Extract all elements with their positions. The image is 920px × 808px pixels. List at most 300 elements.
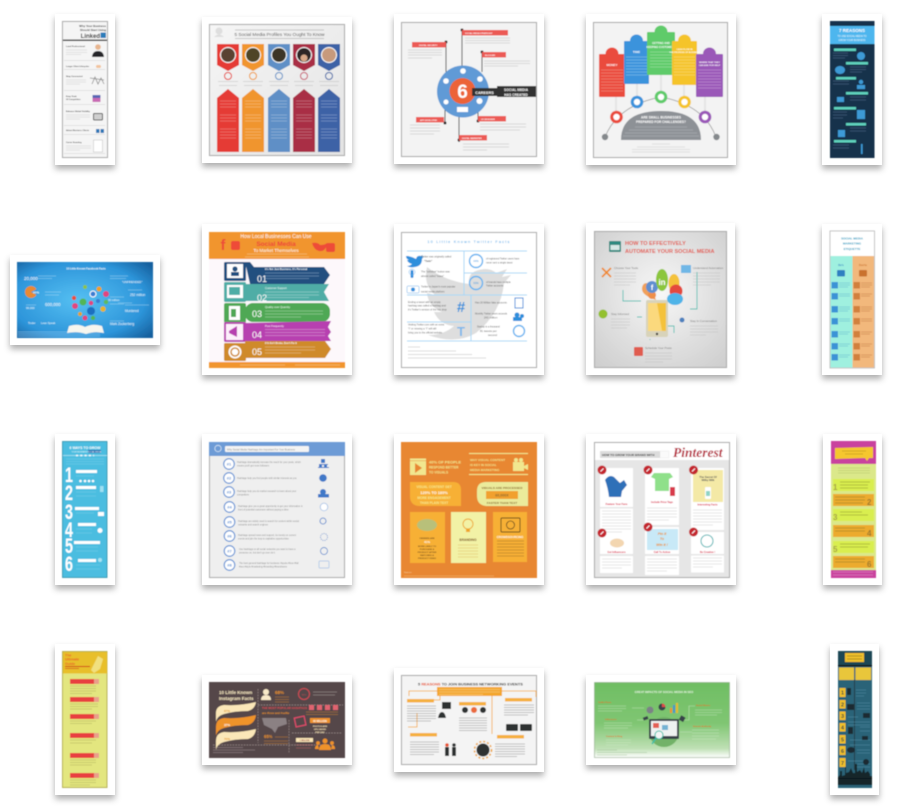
row 01: 01	[257, 274, 267, 284]
stats text: Tinder	[28, 321, 36, 325]
title: Instagram Facts	[219, 696, 254, 701]
title: SOCIAL MEDIA	[841, 236, 864, 240]
chart: orange pie: 66%	[33, 290, 39, 294]
panel: Social Media Marketing Etiquette	[822, 224, 882, 375]
panel: tall dark teal skyline infographic: 2	[841, 702, 844, 708]
panel: Why Social Media Hashtags Are Important: #6	[227, 534, 232, 538]
title: To Market Themselves	[253, 248, 299, 253]
label: careers: HAS CREATED	[504, 93, 528, 97]
arc connector	[605, 97, 716, 137]
header	[600, 445, 724, 460]
panel: Why Social Media Hashtags Are Important: #1	[227, 462, 232, 466]
stats text: 30 million	[108, 298, 120, 302]
icon: tag	[91, 656, 103, 673]
stats: are #love and #selfie	[262, 711, 290, 715]
panel: Why Social Media Hashtags Are Important: The best general hashtags for business: #quote #love #fail	[239, 562, 299, 565]
title: 7 REASONS	[839, 28, 865, 33]
panel: tall magenta and lime infographic	[823, 434, 882, 585]
facts text: Startup in a thousand	[477, 326, 500, 328]
stat: engagement: 120% TO 180%	[420, 490, 448, 495]
facts text: it's Twitter's version of the mic drop	[408, 308, 447, 312]
row 02: Customer Support	[265, 286, 287, 290]
stat: engagement	[410, 482, 461, 506]
panel: Why Social Media Hashtags Are Important: #seo #style #marketing #branding #brandname	[239, 566, 288, 568]
tile: call to action: Win It !	[656, 543, 669, 547]
title	[625, 241, 714, 255]
card: what can help	[696, 48, 723, 97]
title: Guide	[65, 662, 75, 666]
block: viewers: 41%	[424, 540, 430, 544]
tile: get influencers: Get Influencers	[607, 551, 626, 554]
icons	[318, 459, 329, 568]
panel: 5 Social Media Profiles	[202, 17, 352, 163]
icons: social bubbles	[72, 285, 109, 320]
row 03: Quality over Quantity	[265, 305, 291, 309]
card: cash flow: CASH FLOW IN	[676, 48, 693, 51]
panel: Why Social Media Hashtags Are Important: #7	[227, 548, 232, 554]
row 04: 04	[252, 330, 262, 340]
stat: engagement: VISUAL CONTENT GET	[416, 485, 452, 489]
panel: Why Social Media Hashtags Are Important: #5	[227, 520, 232, 524]
sections: text rows: Lead Professional	[66, 46, 85, 48]
stat: processed faster: 60,000X	[495, 494, 509, 498]
icons: hash, T, users	[457, 298, 524, 339]
panel: tall dark teal skyline infographic: 1	[841, 690, 844, 696]
tile: interesting facts	[691, 468, 724, 530]
photo and upload stats: UPLOADED	[314, 728, 327, 731]
sections: text rows: Enhance Global Visibility	[66, 110, 91, 113]
panel: Why Social Media Hashtags Are Important: #8	[227, 562, 232, 568]
dome heading	[621, 111, 701, 140]
panel: 10 Little Known Twitter Facts: 63%	[473, 281, 479, 285]
profile: crimson	[293, 44, 315, 152]
chart: competition bars	[92, 95, 100, 102]
panel: tall magenta and lime infographic: 2	[867, 498, 872, 507]
facts text: "t" or missing a "t" will still	[408, 328, 437, 330]
panel: tall magenta and lime infographic: 6	[867, 560, 872, 569]
section headings: Stay In Conversation	[690, 319, 717, 323]
facts text: Visiting Twitter.com with an extra	[408, 324, 445, 326]
row 05: 05	[252, 347, 262, 357]
tile: call to action	[645, 527, 679, 575]
facts text: second	[488, 333, 497, 337]
profile: orange	[242, 44, 264, 152]
card: cash flow	[669, 34, 700, 85]
tile: interesting facts: Interesting Facts	[697, 504, 718, 506]
block: viewers: WATCHING A	[420, 554, 434, 557]
panel: Why Social Media Hashtags Are Important: Hashtags help you find people with similar interests as you	[237, 477, 297, 480]
stats text	[24, 276, 145, 326]
heading: why visual content: WHY VISUAL CONTENT	[470, 458, 505, 462]
icons: hash, T, users: #	[457, 299, 466, 316]
step bars	[74, 470, 104, 562]
title	[70, 446, 102, 454]
panel: 10 Little Known Twitter Facts: 44%	[473, 259, 479, 263]
stats text: Lean Speak	[41, 321, 56, 325]
row 05: If It Ain't Broke, Don't Fix It	[265, 342, 297, 345]
icons: social logos: f	[220, 237, 226, 254]
connectors	[623, 272, 697, 340]
panel: How To Grow Your Brand With Pinterest	[586, 434, 736, 585]
numbers: 5	[65, 534, 73, 558]
title: HOW TO EFFECTIVELY	[625, 241, 686, 247]
heading: LinkedIn: Linked	[81, 34, 100, 40]
panel: Why Social Media Hashtags Are Important: means you'll get more followers	[237, 464, 270, 468]
numbers: 1	[65, 463, 73, 487]
title: SOCIAL MEDIA	[88, 450, 102, 454]
row 02	[224, 282, 329, 303]
dos and donts lists	[832, 282, 838, 360]
section labels	[407, 698, 532, 738]
sections: text rows	[64, 46, 105, 154]
panel: Why Social Media Hashtags Are Important: #4	[227, 504, 232, 510]
facts text: hashtag was called a hashtag and	[408, 304, 446, 308]
stats text: 99,000	[26, 306, 35, 310]
facts text: Has 20 Million fake accounts	[475, 302, 508, 304]
title: ETIQUETTE	[844, 247, 860, 251]
panel: Why Visual Content Is Key: Sources:	[404, 572, 412, 574]
panel: tall magenta and lime infographic: 1	[833, 483, 838, 492]
row 04	[224, 321, 331, 342]
stat: 40 percent: 40% OF PEOPLE	[429, 460, 461, 464]
facts text: The "unfollow" button was	[421, 270, 450, 274]
stat: processed faster: FASTER THAN TEXT	[487, 501, 517, 505]
card: what can help: CAN ASK FOR HELP	[699, 64, 721, 67]
watermark: bird	[426, 267, 511, 340]
stat: 40 percent: TO VISUALS	[429, 470, 448, 474]
heading: LinkedIn	[79, 24, 106, 40]
column heads: Don'ts	[859, 263, 868, 267]
ribbons: 37%	[224, 723, 230, 727]
banner	[835, 447, 873, 461]
stat: engagement: THAN PLAIN TEXT	[420, 501, 448, 505]
section headings	[598, 702, 712, 738]
stats: THE MOST POPULAR HASHTAGS	[262, 706, 307, 710]
title	[841, 236, 864, 251]
facts text: social media platform	[421, 290, 445, 294]
facts text: 241 million	[484, 316, 498, 320]
panel: 6 Careers Social Media Has Created: DIGITAL SECURITY	[419, 44, 438, 47]
panel: Why Social Media Hashtags Are Important: events and join the loop to capitalize opportunities	[238, 538, 290, 540]
card: cash flow: THE PROFESS OF BUSINESS	[669, 52, 700, 54]
label: careers: CAREERS	[475, 91, 494, 95]
panel: The Ultimate Guide	[55, 644, 115, 795]
panel: tall dark teal skyline infographic: 6	[841, 749, 844, 755]
facts text: Twitter was originally called	[421, 256, 452, 258]
stats text: 20,000	[24, 276, 38, 281]
panel: 7 Reasons	[822, 14, 882, 165]
numbers: 2	[65, 481, 73, 505]
numbers: 6	[65, 552, 73, 576]
block: viewers: VIEWERS ARE	[419, 537, 435, 540]
panel: 6 Careers Social Media Has Created: SOCIAL MEDIA STRATEGIST	[465, 32, 493, 35]
rows	[833, 479, 874, 568]
panel: 10 Little Known Facebook Facts	[10, 255, 160, 345]
ribbons	[216, 702, 256, 750]
stat: 65 percent: 65%	[264, 734, 273, 739]
numbers	[65, 463, 73, 576]
tile: call to action: Call To Action	[654, 551, 671, 554]
section headings: Understand Automation	[693, 266, 724, 270]
title	[845, 653, 864, 662]
facts text: Twitter accounts	[486, 284, 504, 288]
ribbons	[834, 48, 868, 142]
tile: interesting facts: Milky Milk	[702, 478, 715, 482]
panel: 6 Careers Social Media Has Created: BLOGGER	[485, 55, 496, 57]
panel: Are Small Businesses Prepared For Challenges	[586, 14, 736, 165]
icon: rectangle badge	[407, 286, 419, 293]
tile: be creative: Be Creative !	[700, 551, 715, 554]
intro box	[437, 687, 502, 696]
icon: open book	[67, 325, 104, 334]
stats	[261, 688, 337, 715]
tile: feature your fans: Feature Your Fans	[606, 503, 628, 506]
phone and fan icons: f	[651, 285, 654, 292]
section headings	[611, 266, 724, 350]
row 01	[224, 262, 330, 284]
tile: call to action: Pin It	[658, 532, 667, 536]
panel: 6 Careers Social Media Has Created	[394, 14, 544, 164]
panel: How Local Businesses Can Use Social Media	[202, 224, 352, 375]
facts text: almost called "leave"	[421, 275, 444, 278]
title: TO USE SOCIAL MEDIA TO	[837, 35, 867, 38]
panel: tall dark teal skyline infographic: 3	[841, 714, 844, 720]
panel: Why Social Media Hashtags Are Important: networks and search engines	[238, 524, 269, 526]
icons	[438, 702, 532, 756]
header: Pinterest	[673, 445, 724, 460]
panel: 6 Careers Social Media Has Created: APP DEVELOPER	[420, 119, 438, 122]
panel: tall magenta and lime infographic: 3	[833, 513, 838, 522]
row 02: 02	[257, 293, 267, 303]
block: viewers: MORE LIKELY TO	[418, 546, 436, 548]
panel: Why Social Media Hashtags Are Important: Hashtags help you do market research to learn about your	[237, 490, 296, 493]
row 03	[224, 303, 330, 323]
icons: likes	[309, 705, 338, 710]
panel: tall dark teal skyline infographic: 7	[841, 761, 844, 767]
panel: Why Visual Content Is Key	[394, 434, 544, 585]
section headings: Domain Authority	[693, 725, 712, 728]
stats text: Murdered	[125, 309, 139, 313]
panel: 6 Careers Social Media Has Created: UX DESIGNER	[481, 119, 495, 121]
title: 5 REASONS TO JOIN BUSINESS NETWORKING EVENTS	[418, 682, 523, 686]
title	[65, 654, 79, 666]
icon: businessman	[92, 44, 104, 57]
profile: blue	[268, 44, 290, 152]
row 04: Post Frequently	[265, 324, 284, 328]
icon: users	[315, 738, 335, 750]
label: careers: SOCIAL MEDIA	[504, 88, 529, 92]
title: 5 Social Media Profiles You Ought To Know	[234, 32, 325, 37]
column heads	[837, 263, 868, 276]
icons: hash, T, users: T	[457, 324, 465, 339]
panel: Why Social Media Hashtags Are Important: #2	[227, 476, 232, 480]
panel: Why Social Media Hashtags Are Important: Hashtags spread news and support, be trendy on current	[238, 534, 296, 537]
panel: Why Social Media Hashtags Are Important: competitors	[237, 494, 250, 496]
column heads: Do's	[838, 263, 844, 267]
panel: tall dark teal skyline infographic	[830, 644, 879, 795]
heading: why visual content: MEDIA MARKETING	[470, 468, 500, 472]
phone and fan icons	[642, 269, 683, 337]
icons: topics	[598, 265, 691, 356]
title	[837, 28, 867, 42]
title: YOUR BUSINESS WITH	[72, 452, 93, 454]
row 01: It's Not Just Business, It's Personal	[265, 268, 307, 271]
title: AUTOMATE YOUR SOCIAL MEDIA	[625, 249, 714, 255]
title: The	[65, 654, 71, 658]
stats: 90%	[302, 694, 306, 696]
block: crowdsourcing: CROWDSOURCING	[497, 535, 524, 539]
heading: LinkedIn: Why Your Business	[79, 24, 106, 28]
facts text: Ending a tweet with an empty	[408, 301, 441, 304]
block: branding: BRANDING	[459, 538, 477, 542]
stat: 40 percent	[410, 458, 461, 475]
section headings: Stay Informed	[611, 312, 629, 316]
labels: red career ribbons	[412, 30, 508, 140]
section headings: Content Is King	[606, 735, 623, 738]
skyline	[838, 764, 872, 785]
row 05	[224, 341, 331, 361]
title: 6 WAYS TO GROW	[70, 446, 101, 450]
facts text: "Twttr"	[424, 260, 433, 263]
panel: 6 Careers Social Media Has Created: DIGITAL MARKETER	[462, 137, 482, 140]
header: HOW TO GROW YOUR BRAND WITH	[602, 453, 654, 457]
row 03: 03	[252, 309, 262, 319]
section headings: Traffic Flows	[598, 702, 612, 704]
stat rings	[470, 254, 524, 336]
card: money: MONEY	[606, 63, 618, 67]
ribbons	[70, 679, 94, 778]
block: viewers: PRODUCT AFTER	[418, 551, 437, 554]
sections: text rows: Career Scouting	[66, 141, 82, 144]
panel: LinkedIn infographic thumbnail	[55, 14, 115, 165]
sections: text rows: Of Competition	[66, 98, 81, 101]
title: How Local Businesses Can Use	[240, 234, 312, 240]
facts text: Monthly Twitter users exceeds	[475, 312, 508, 316]
panel: 6 Ways To Grow Your Business	[55, 434, 115, 585]
panel: tall dark teal skyline infographic: 5	[841, 738, 844, 744]
numbered list	[840, 688, 846, 767]
dome heading: PREPARED FOR CHALLENGES?	[636, 120, 686, 124]
photo and upload stats	[294, 716, 330, 748]
dome heading: ARE SMALL BUSINESSES	[641, 116, 681, 120]
title	[240, 234, 312, 253]
map	[262, 718, 287, 733]
title: GROW YOUR BUSINESS	[839, 40, 866, 42]
panel: Why Social Media Hashtags Are Important: #3	[227, 490, 232, 494]
icon: touch	[409, 269, 415, 278]
panel: Why Social Media Hashtags Are Important: Hashtags give you a great opportunity to get your information in	[238, 505, 303, 508]
title: GREAT IMPACTS OF SOCIAL MEDIA IN SEO	[635, 690, 694, 694]
panel: Why Social Media Hashtags Are Important: presence on, but don't go over do it	[239, 552, 275, 554]
numbered nodes	[610, 91, 711, 123]
search bar: Why Social Media Hashtags Are Important For Your Business	[227, 448, 296, 452]
card: getting and keeping customers: KEEPING CUSTOMERS	[647, 45, 676, 49]
title: Ultimate	[65, 658, 79, 662]
facts text	[408, 256, 520, 337]
stats text: Mark Zuckerberg	[110, 322, 134, 326]
sections: text rows: Stay Connected	[66, 75, 83, 78]
label: careers	[472, 86, 536, 97]
hashtag list	[224, 459, 235, 570]
panel: Why Social Media Hashtags Are Important: Hashtags are widely used to search for content within social	[238, 520, 299, 523]
ribbons: 70%	[224, 737, 230, 741]
photo and upload stats: 1 BILLION	[300, 740, 310, 742]
block: viewers: PURCHASE A	[420, 548, 435, 551]
tile: interesting facts: The Secret Of	[699, 475, 717, 479]
photo and upload stats: PHOTOS ARE	[313, 725, 328, 728]
title	[219, 690, 254, 701]
stats: 68%	[275, 690, 284, 695]
panel: tall dark teal skyline infographic: 4	[841, 726, 845, 732]
panel: Why Social Media Hashtags Are Important: front of potential customers without paying a dime	[238, 508, 289, 512]
heading: why visual content: IS KEY IN SOCIAL	[470, 463, 497, 467]
numbers: 3	[65, 500, 73, 524]
panel: Why Social Media Hashtags Are Important: Hashtags dramatically increase the reach for your posts, which	[237, 461, 302, 464]
numbers: 4	[65, 518, 73, 542]
stat: processed faster: VISUALS ARE PROCESSED	[482, 486, 523, 490]
tile: call to action: To	[660, 537, 665, 541]
panel: Why Social Media Hashtags Are Important: Use hashtags on all social networks you want to have a	[239, 548, 296, 551]
section headings: Choose Your Tools	[614, 266, 639, 270]
block: viewers	[410, 512, 445, 563]
card: getting and keeping customers: GETTING AND	[652, 41, 670, 45]
facts text: of registered Twitter users have	[486, 258, 520, 260]
tile: include price tags: Include Price Tags	[651, 501, 674, 504]
monitor and icons	[643, 703, 686, 747]
title: 10 Little Known Facebook Facts	[66, 266, 106, 270]
sections: text rows: Attract Business Clients	[66, 129, 90, 132]
heading: LinkedIn: Should Start Using	[80, 28, 106, 32]
panel: 5 Reasons To Join Business Networking Events	[394, 668, 544, 772]
stat: 40 percent: RESPOND BETTER	[429, 466, 459, 470]
profile: red	[217, 44, 239, 152]
sections: text rows: Longer Client Lifecycles	[66, 65, 90, 68]
panel: How To Effectively Automate Your Social Media	[586, 223, 735, 375]
facts text: of brands have multiple	[486, 281, 511, 284]
facts text: bring you to the official website	[408, 332, 443, 334]
facts text: never sent a single tweet	[486, 262, 513, 264]
panel: tall magenta and lime infographic: 5	[833, 545, 838, 554]
stats text: "UNFRIENDED"	[122, 280, 142, 284]
panel: tall magenta and lime infographic: 4	[867, 529, 872, 538]
card: getting and keeping customers	[647, 26, 676, 75]
block: viewers: PRODUCT VIDEO	[418, 558, 436, 560]
chart: career wheel: 6	[457, 82, 468, 103]
facts text: Twitter is Japan's most popular	[421, 286, 455, 288]
heading: why visual content	[469, 454, 528, 474]
card: time: TIME	[633, 50, 640, 54]
section headings: Influencers	[605, 719, 617, 721]
yellow panels	[839, 668, 871, 680]
profile: navy	[318, 44, 340, 152]
panel: 10 Little Known Instagram Facts	[202, 675, 352, 765]
stats text: 600,000	[45, 302, 61, 307]
phone and fan icons: in	[658, 278, 666, 287]
panel: Great Impacts Of Social Media In SEO	[586, 675, 736, 765]
icon: image frame	[609, 241, 621, 252]
icon: twitter bird	[406, 255, 424, 267]
title: 10 Little Known Twitter Facts	[427, 240, 511, 244]
panel: Why Social Media Hashtags Are Important	[202, 434, 352, 585]
title: 10 Little Known	[219, 690, 253, 695]
section headings: Social Shares	[696, 705, 711, 707]
title: MARKETING	[843, 242, 862, 246]
sections: text rows: Keep Track	[66, 96, 78, 98]
pins	[598, 466, 698, 538]
facts text: 81 tweets per	[480, 329, 497, 333]
stat: engagement: MORE ENGAGEMENT	[417, 496, 451, 500]
photo and upload stats: PER DAY	[315, 731, 325, 734]
